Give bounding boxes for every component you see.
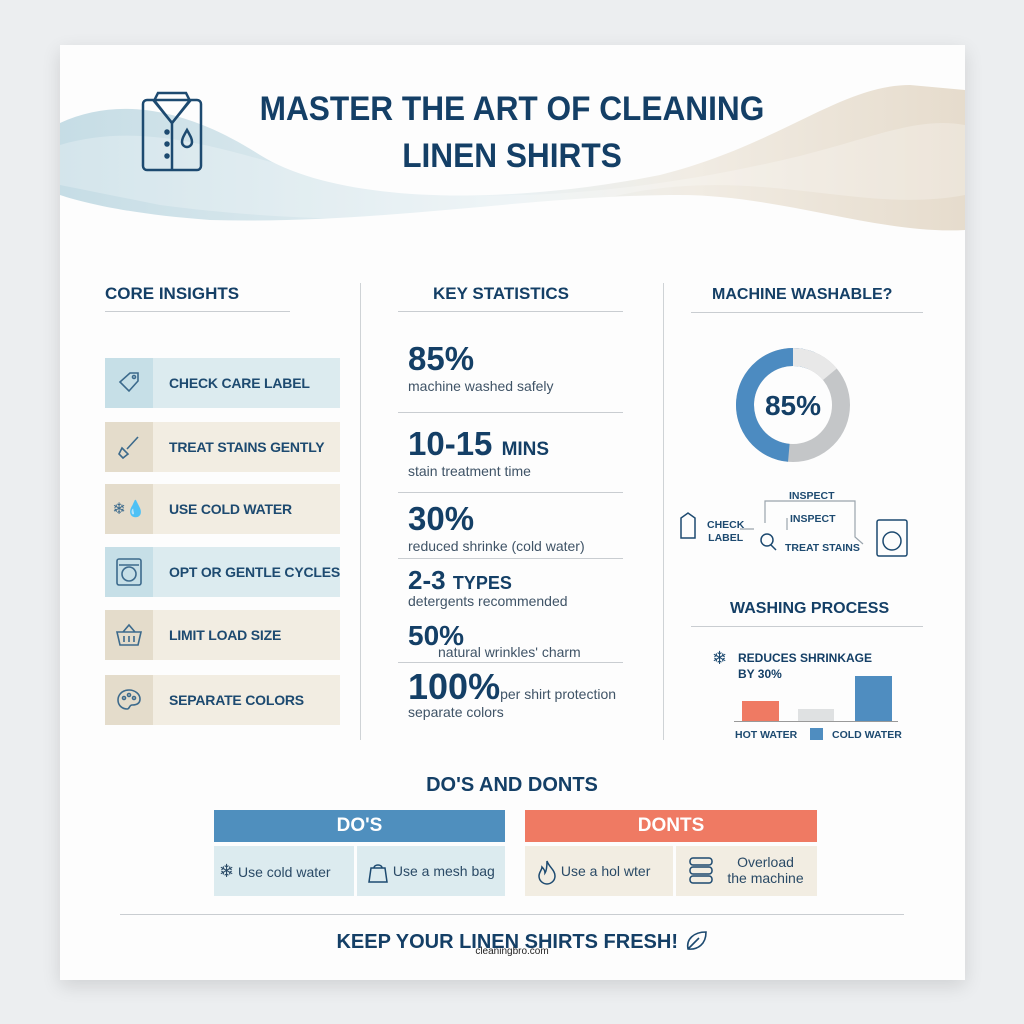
- donut chart: 85%: [765, 390, 821, 421]
- header waves: [60, 85, 965, 230]
- dont: hot water: Use a hol wter: [561, 863, 650, 879]
- bar chart: ❄: [712, 648, 727, 668]
- stat 50%: 50%: [408, 620, 464, 651]
- title: MASTER THE ART OF CLEANING: [260, 90, 764, 128]
- footer slogan: KEEP YOUR LINEN SHIRTS FRESH!: [336, 931, 678, 953]
- dont: overload: Overload: [737, 854, 794, 870]
- do: cold water: ❄ Use cold water: [219, 861, 331, 881]
- bar chart: BY 30%: [738, 667, 782, 681]
- bar chart: HOT WATER: [735, 729, 797, 741]
- stat 2-3 types: detergents recommended: [408, 593, 568, 609]
- item: gentle cycles: OPT OR GENTLE CYCLES: [169, 564, 340, 580]
- item: separate colors: SEPARATE COLORS: [169, 692, 304, 708]
- flow diagram: LABEL: [708, 532, 743, 544]
- stat 85%: [408, 340, 554, 394]
- dont: hot water: [525, 846, 673, 896]
- stat 30%: [408, 500, 585, 554]
- do: cold water: [214, 846, 354, 896]
- stat 100%: 100%per shirt protection: [408, 666, 616, 707]
- flow diagram: TREAT STAINS: [785, 542, 860, 554]
- watermark: cleaningbro.com: [475, 946, 549, 957]
- item: cold water: [105, 484, 340, 534]
- heading: key statistics: KEY STATISTICS: [433, 284, 569, 303]
- panel: key statistics: [398, 284, 623, 720]
- heading: machine washable: MACHINE WASHABLE?: [712, 286, 892, 303]
- dont: overload: the machine: [727, 870, 804, 886]
- title: LINEN SHIRTS: [402, 137, 622, 175]
- item: check care label: CHECK CARE LABEL: [169, 375, 310, 391]
- bar chart: COLD WATER: [832, 729, 902, 741]
- donut chart: [736, 348, 850, 462]
- item: limit load: [105, 610, 340, 660]
- bar chart: REDUCES SHRINKAGE: [738, 651, 872, 665]
- heading: washing process: WASHING PROCESS: [730, 600, 889, 617]
- stat 50%: [408, 620, 581, 660]
- heading: do's and donts: DO'S AND DONTS: [426, 774, 598, 796]
- bar chart: [712, 648, 902, 741]
- item: cold water: USE COLD WATER: [169, 501, 292, 517]
- flow diagram: INSPECT: [789, 490, 835, 502]
- panel: core insights: [105, 284, 340, 725]
- stat 50%: natural wrinkles' charm: [438, 644, 581, 660]
- item: cold water: ❄💧: [112, 501, 146, 518]
- panel: do's: [214, 810, 505, 896]
- stat 30%: 30%: [408, 500, 474, 537]
- title: [260, 90, 764, 175]
- panel: donts: DONTS: [638, 815, 704, 836]
- panel: machine washable: [680, 286, 923, 741]
- flow diagram: INSPECT: [790, 513, 836, 525]
- item: check care label: [105, 358, 340, 408]
- stat 30%: reduced shrinke (cold water): [408, 538, 585, 554]
- flow diagram: CHECK: [707, 519, 744, 531]
- panel: donts: [525, 810, 817, 896]
- stat 85%: machine washed safely: [408, 378, 554, 394]
- icon: shirt: [142, 92, 202, 172]
- item: gentle cycles: [105, 547, 340, 597]
- stat 85%: 85%: [408, 340, 474, 377]
- stat 10-15 mins: [408, 425, 549, 479]
- do: mesh bag: Use a mesh bag: [393, 863, 495, 879]
- stat 100%: separate colors: [408, 704, 504, 720]
- stat 10-15 mins: 10-15 MINS: [408, 425, 549, 462]
- item: limit load: LIMIT LOAD SIZE: [169, 627, 281, 643]
- dont: overload: [676, 846, 817, 896]
- item: treat stains: [105, 422, 340, 472]
- stat 2-3 types: 2-3 TYPES: [408, 565, 512, 595]
- flow diagram: [680, 490, 908, 557]
- stat 10-15 mins: stain treatment time: [408, 463, 531, 479]
- item: treat stains: TREAT STAINS GENTLY: [169, 439, 324, 455]
- item: separate colors: [105, 675, 340, 725]
- stat 2-3 types: [408, 565, 568, 609]
- panel: do's: DO'S: [337, 815, 382, 836]
- heading: core insights: CORE INSIGHTS: [105, 284, 239, 303]
- do: mesh bag: [357, 846, 505, 896]
